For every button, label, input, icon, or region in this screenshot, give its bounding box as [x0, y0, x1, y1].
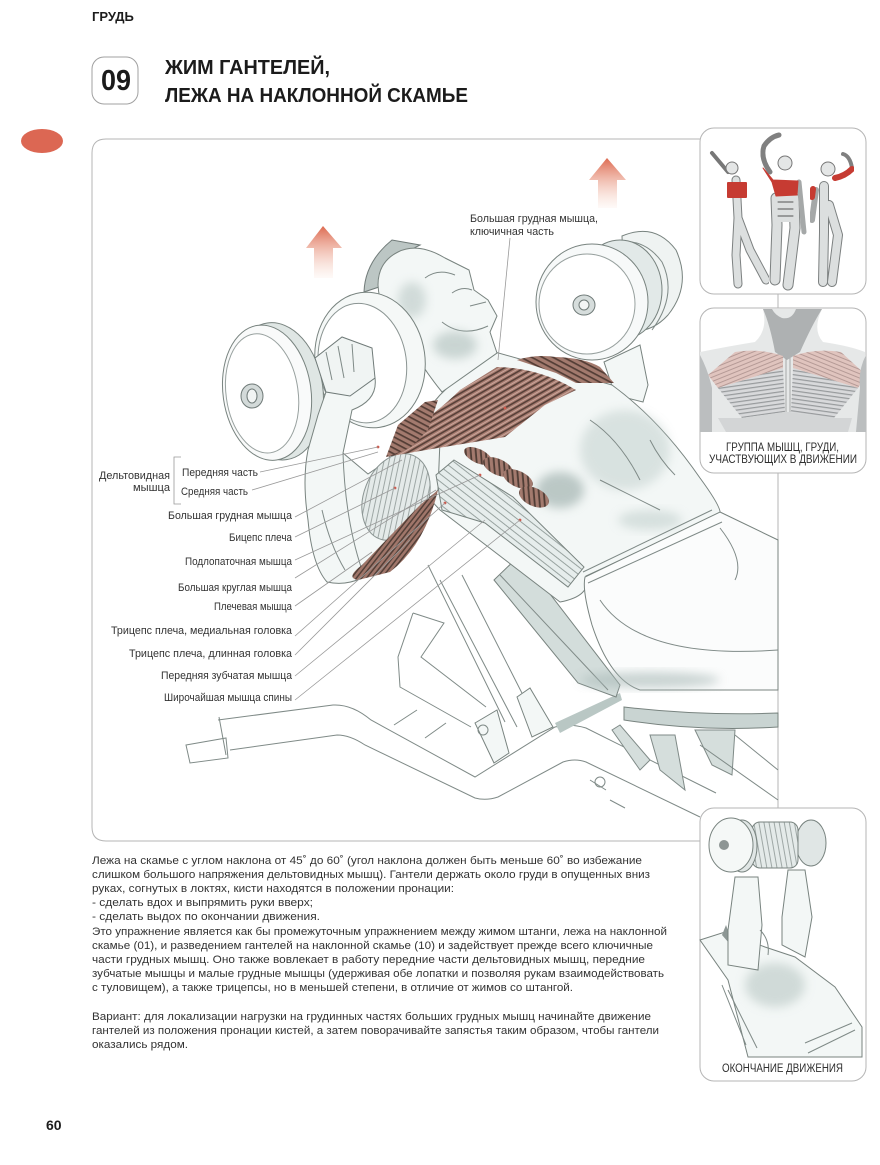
- text block: description: с туловищем), а также трицепсы, но в меньшей степени, в отличие от жимов со штангой.: [92, 982, 573, 994]
- illustration: head: [364, 240, 497, 392]
- arrow: left up arrow: [306, 226, 342, 278]
- muscle labels: Большая круглая мышца: [178, 582, 292, 594]
- illustration: right dumbbell: [536, 231, 682, 360]
- title: ЛЕЖА НА НАКЛОННОЙ СКАМЬЕ: [165, 83, 468, 107]
- muscle labels: Передняя часть: [182, 467, 258, 479]
- muscle labels: Трицепс плеча, длинная головка: [129, 648, 292, 660]
- red chapter marker: [21, 129, 63, 153]
- chest drawing: [700, 309, 866, 432]
- section heading: ГРУДЬ: [92, 9, 134, 24]
- end position dumbbell: [709, 818, 826, 872]
- chest caption: ГРУППА МЫШЦ, ГРУДИ,: [726, 442, 839, 454]
- leader lines: [174, 238, 520, 700]
- chest caption: [709, 442, 857, 466]
- text block: description: руках, согнутых в локтях, кисти находятся в положении пронации:: [92, 883, 454, 895]
- illustration: athlete torso and legs: [388, 345, 778, 690]
- text block: description: гантелей из положения пронации кистей, а затем поворачивайте запястья таким образом, чтобы гантели: [92, 1025, 659, 1037]
- end position torso: [700, 925, 862, 1057]
- text block: description: слишком большого напряжения дельтовидных мышц). Гантели держать около груди в опущенных вниз: [92, 869, 650, 881]
- text block: description: зубчатые мышцы и малые грудные мышцы (удерживая обе лопатки и позволяя рукам взаимодействовать: [92, 968, 664, 980]
- label: clavicular pectoralis: Большая грудная мышца,: [470, 213, 598, 225]
- muscle labels: Подлопаточная мышца: [185, 556, 292, 568]
- exercise number badge: [92, 57, 138, 104]
- end position caption: ОКОНЧАНИЕ ДВИЖЕНИЯ: [722, 1063, 843, 1075]
- panel: muscles used figures: [700, 128, 866, 294]
- title: [164, 55, 468, 107]
- text block: description: - сделать выдох по окончании движения.: [92, 911, 320, 923]
- illustration: left dumbbell: [214, 285, 434, 467]
- text block: description: оказались рядом.: [92, 1039, 188, 1051]
- text block: description: скамье (01), и разведением гантелей на наклонной скамье (10) и задействует прежде всего ключичные: [92, 940, 653, 952]
- panel: main illustration frame: [92, 139, 778, 841]
- text block: description: части грудных мышц. Оно также вовлекает в работу передние части дельтовидных мышц, передние: [92, 954, 645, 966]
- illustration: bench backrest and seat: [494, 555, 778, 728]
- exercise number badge: 09: [101, 65, 131, 97]
- title: ЖИМ ГАНТЕЛЕЙ,: [164, 55, 330, 79]
- text block: description: Лежа на скамье с углом наклона от 45˚ до 60˚ (угол наклона должен быть меньше 60˚ во избежание: [92, 855, 642, 867]
- muscle labels: Передняя зубчатая мышца: [161, 670, 292, 682]
- panel: chest muscle group: [700, 308, 866, 473]
- illustration: left arm: [305, 337, 443, 583]
- muscle labels: Плечевая мышца: [214, 601, 292, 613]
- text block: description: - сделать вдох и выпрямить руки вверх;: [92, 897, 313, 909]
- illustration: highlighted muscles: [352, 356, 614, 587]
- chest caption: УЧАСТВУЮЩИХ В ДВИЖЕНИИ: [709, 454, 857, 466]
- muscle labels: Бицепс плеча: [229, 532, 292, 544]
- label: clavicular pectoralis: [470, 213, 598, 238]
- text block: description: Вариант: для локализации нагрузки на грудинных частях больших грудных мышц начинайте движение: [92, 1011, 651, 1023]
- muscle labels: Трицепс плеча, медиальная головка: [111, 625, 292, 637]
- muscle labels: Дельтовидная: [99, 470, 170, 482]
- muscle labels: Широчайшая мышца спины: [164, 692, 292, 704]
- muscle labels: Большая грудная мышца: [168, 510, 292, 522]
- muscle labels: мышца: [133, 482, 170, 494]
- figure: side view right: [812, 154, 852, 282]
- text block: description: Это упражнение является как бы промежуточным упражнением между жимом штанги, лежа на наклонной: [92, 926, 667, 938]
- label: clavicular pectoralis: ключичная часть: [470, 226, 554, 238]
- arrow: right up arrow: [589, 158, 626, 208]
- muscle labels: [99, 467, 292, 704]
- muscle labels: Средняя часть: [181, 486, 248, 498]
- end position arms: [728, 870, 812, 970]
- figure: front view centre: [763, 135, 804, 285]
- figure: side view left: [712, 153, 766, 284]
- illustration: bench frame: [186, 565, 778, 817]
- panel: end of movement: [700, 808, 866, 1081]
- text block: description: [92, 855, 667, 1051]
- page number: 60: [46, 1117, 62, 1133]
